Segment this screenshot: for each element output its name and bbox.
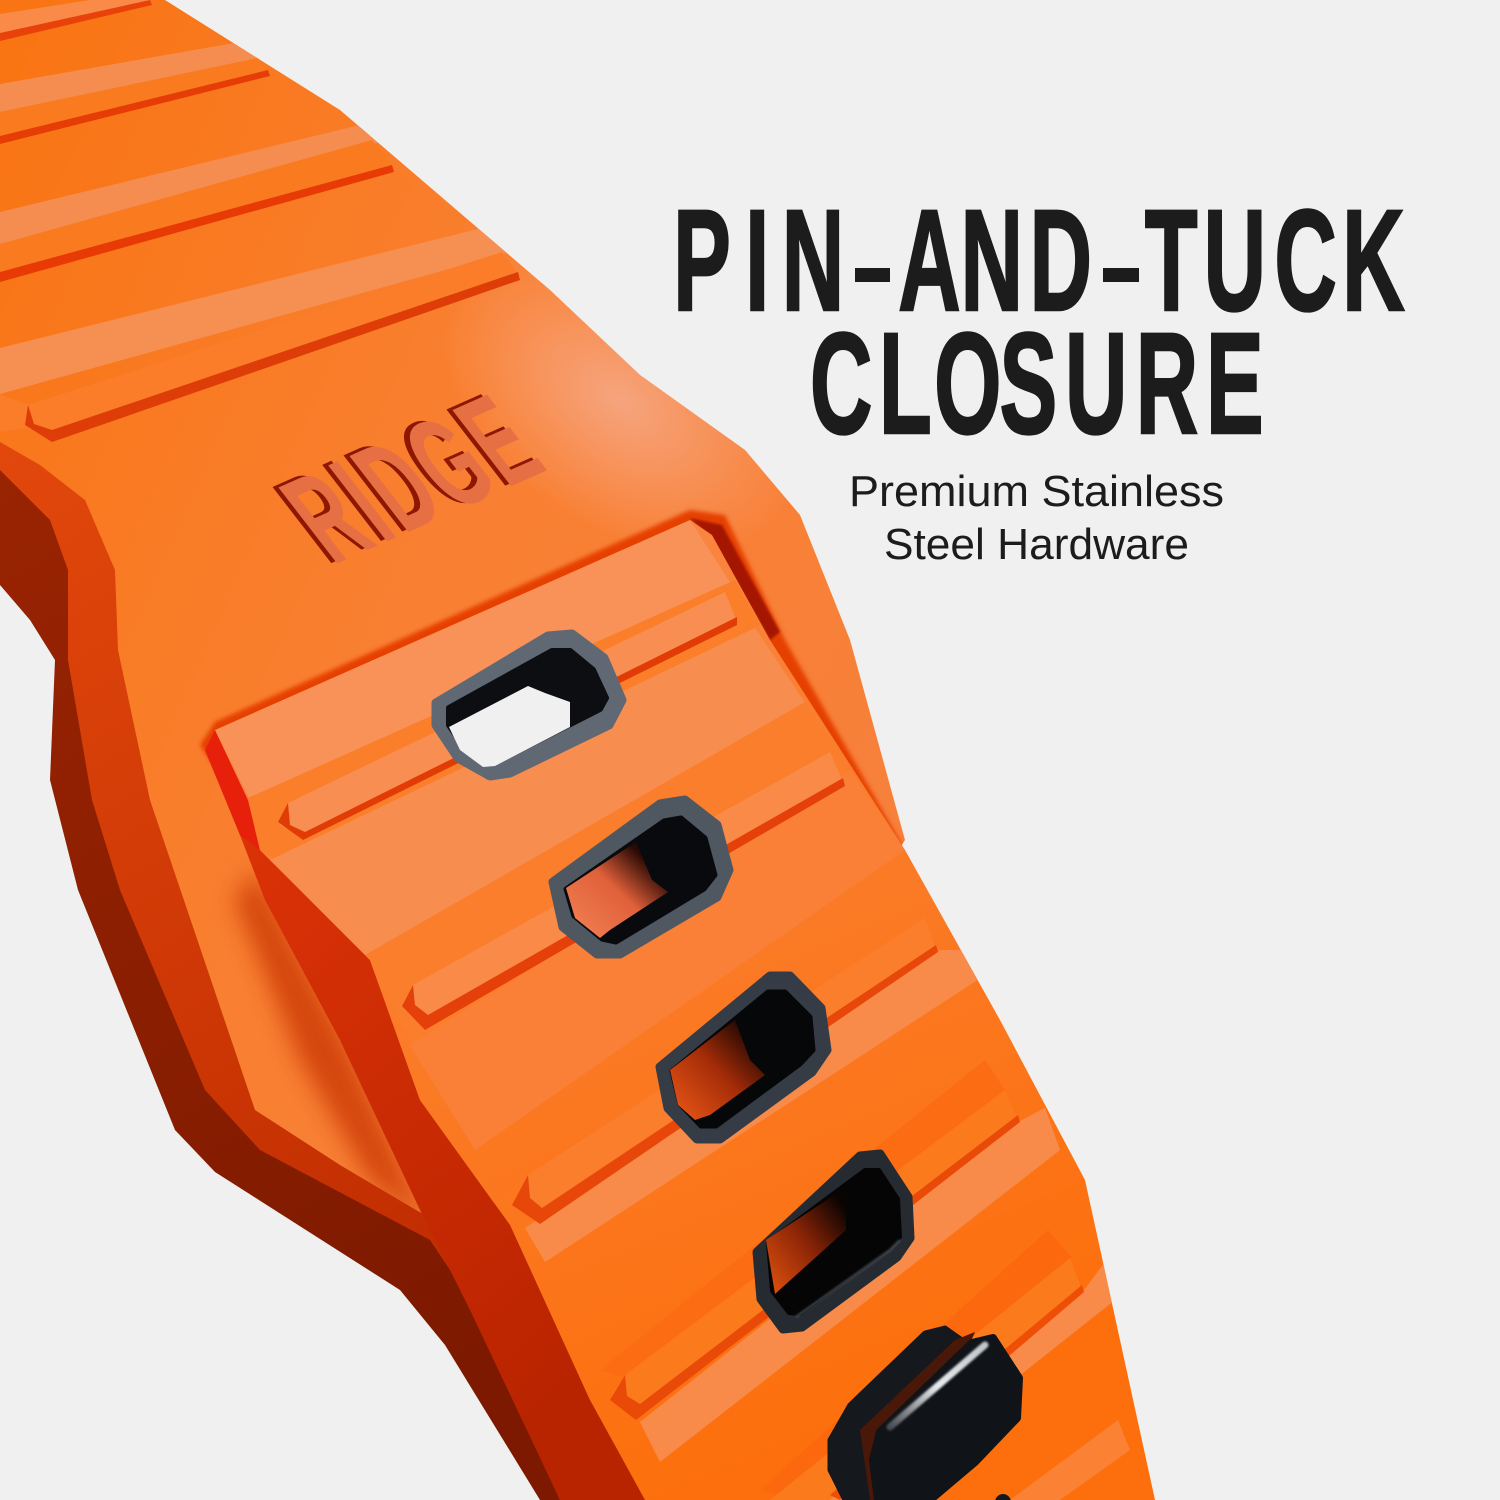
rear strap rim [0, 440, 700, 1500]
title [673, 181, 1405, 465]
title: PIN-AND-TUCK [673, 181, 1405, 342]
watch band illustration [0, 0, 1155, 1500]
slot dark wall [690, 518, 780, 640]
strap hole 4 [757, 1154, 910, 1329]
title: CLOSURE [810, 304, 1264, 465]
slot recess [200, 510, 905, 900]
stainless steel pin [830, 1328, 1019, 1500]
rib 1 face [280, 592, 737, 838]
rib 4 face [612, 1113, 974, 1404]
rear strap shadow side [0, 430, 700, 1500]
lower pin nub [995, 1494, 1011, 1500]
RIDGE engraved logo: RIDGE [251, 369, 562, 589]
interior orange 4 [766, 1188, 846, 1294]
pin highlight [890, 1345, 985, 1427]
lower rim highlight 4 [796, 1240, 900, 1317]
terrace 1 top [215, 520, 735, 800]
rear strap top surface [0, 0, 905, 1230]
interior orange 3 [670, 1020, 765, 1120]
rib 3 face [515, 918, 936, 1215]
rib 3 [0, 125, 378, 244]
shadow cast by front strap [235, 870, 430, 1230]
rear strap shading and ribs [0, 0, 856, 1230]
rib 4 [0, 226, 510, 394]
highlight on rear strap [460, 266, 774, 530]
rib 1 [0, 0, 150, 36]
rib 2 [0, 42, 258, 112]
rib 5 light stripe [830, 1264, 1112, 1500]
strap hole 3 [660, 976, 827, 1139]
darker band above rib 4 [674, 1060, 1004, 1310]
rib 6 face [1010, 1420, 1130, 1500]
front strap terraces and ribs [215, 520, 1130, 1500]
red wedge [205, 730, 260, 850]
rib 5 face [770, 1258, 1082, 1500]
subtitle: Steel Hardware [884, 520, 1189, 569]
terrace 3 [410, 770, 905, 1150]
rib 3 light stripe [525, 950, 985, 1262]
interior orange 2 [566, 842, 668, 938]
pin base collar [830, 1328, 962, 1500]
band around rib 1 [248, 580, 760, 865]
terrace 2 [270, 628, 810, 960]
background seen through hole 1 [449, 686, 570, 767]
rib 4 light stripe [640, 1108, 1060, 1462]
darker band above rib 5 [808, 1230, 1072, 1448]
front strap side wall [205, 750, 660, 1500]
pin cap [873, 1338, 1019, 1500]
subtitle [849, 467, 1224, 569]
rib 2 face [402, 752, 843, 1020]
strap hole 2 [553, 800, 729, 954]
band around rib 2 [365, 702, 810, 971]
pin side [860, 1332, 975, 1500]
strap hole 1 [436, 634, 622, 776]
front strap top surface [215, 520, 1155, 1500]
hyphen bars [855, 268, 890, 282]
RIDGE engraved logo: RIDGE [256, 370, 568, 590]
subtitle: Premium Stainless [849, 467, 1224, 516]
